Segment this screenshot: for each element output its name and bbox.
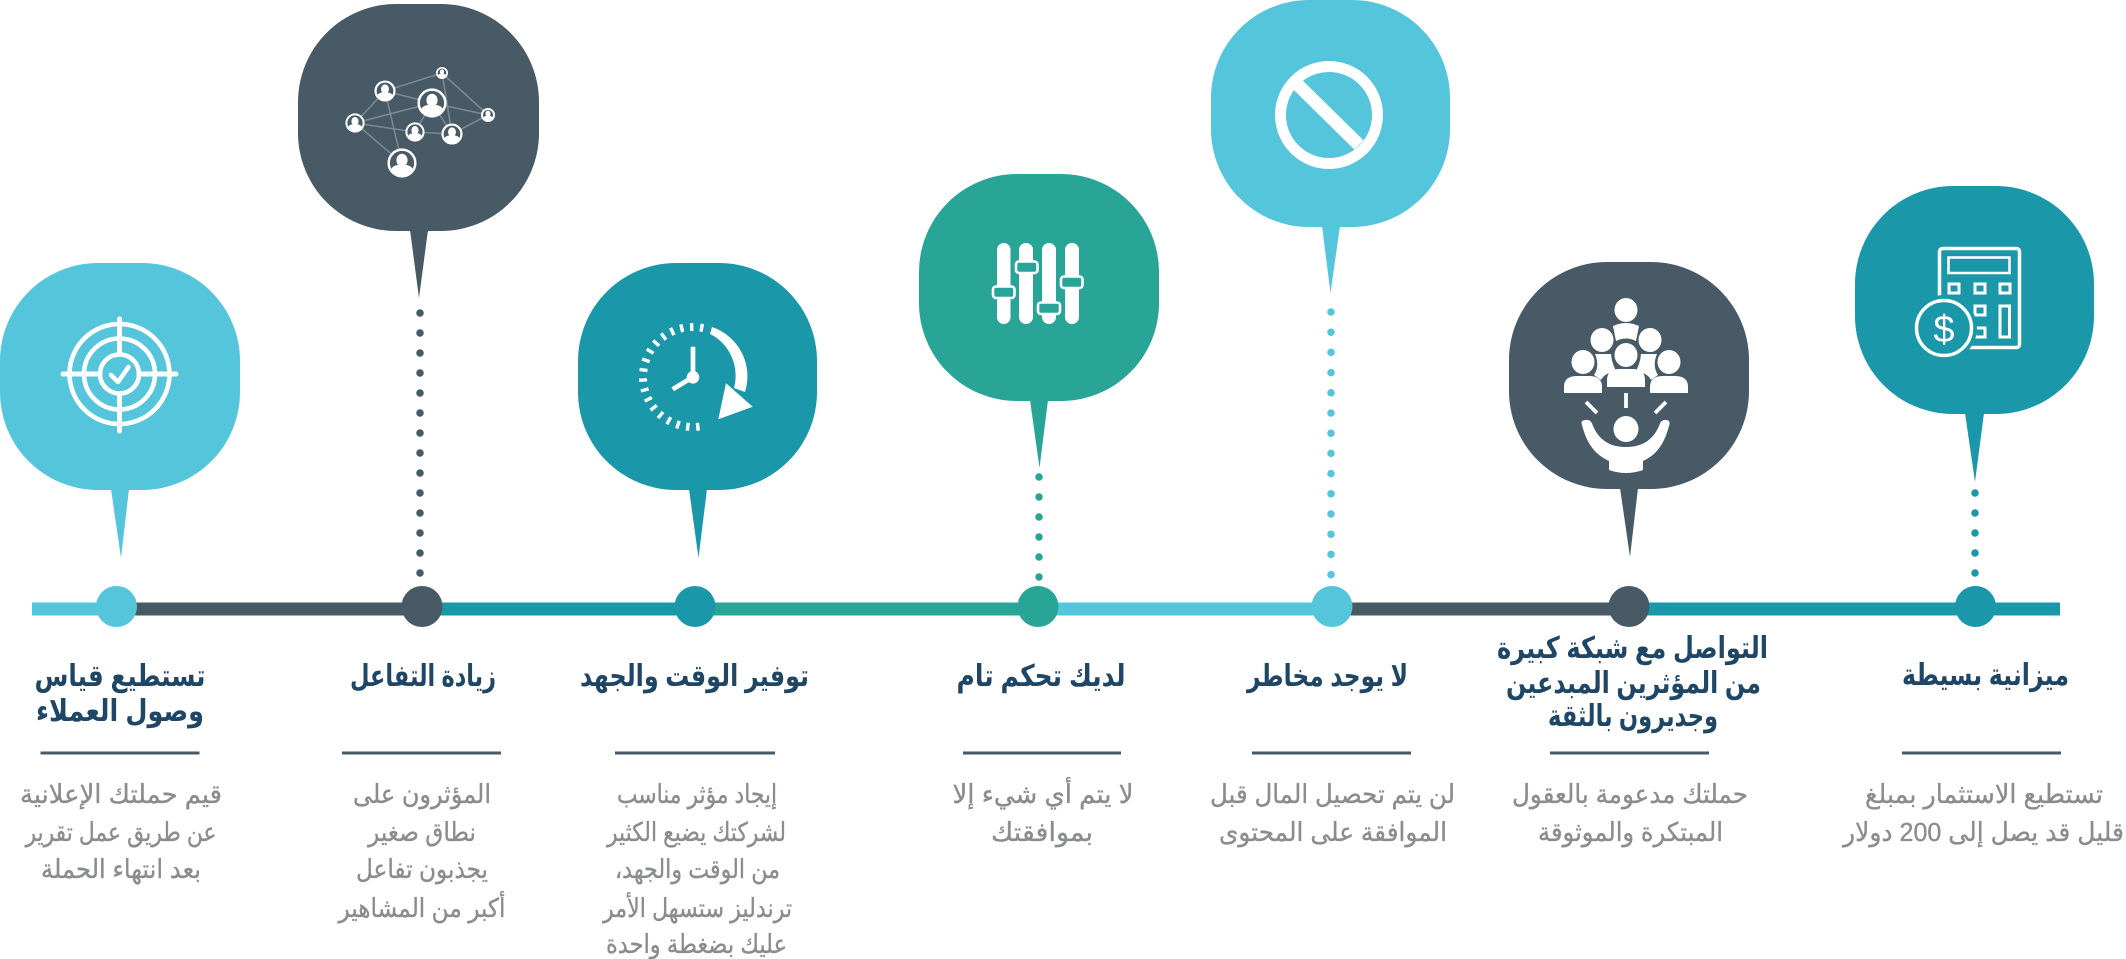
body 7: تستطيع الاستثمار بمبلغ: [1865, 779, 2103, 810]
body 6: [1512, 779, 1748, 848]
body 5: لن يتم تحصيل المال قبل: [1210, 779, 1455, 810]
panel: no risk: [1210, 0, 1455, 848]
body 4: بموافقتك: [991, 817, 1093, 848]
title 6: من المؤثرين المبدعين: [1506, 667, 1761, 700]
body 3: لشركتك يضيع الكثير: [605, 817, 786, 848]
pin bubble 2: [298, 4, 539, 298]
body 7: [1841, 779, 2124, 848]
dotted connector 2: [416, 313, 424, 575]
title 5: لا يوجد مخاطر: [1245, 660, 1408, 693]
body 1: قيم حملتك الإعلانية: [20, 779, 222, 810]
body 4: لا يتم أي شيء إلا: [952, 776, 1134, 810]
panel: network of influencers: [1497, 262, 1768, 848]
node 4: [1018, 586, 1058, 627]
pin bubble 3: [578, 263, 817, 558]
node 3: [674, 586, 716, 627]
dotted connector 7: [1971, 493, 1979, 575]
title 4: لديك تحكم تام: [956, 660, 1126, 694]
body 7: قليل قد يصل إلى 200 دولار: [1841, 817, 2124, 848]
body 1: بعد انتهاء الحملة: [41, 854, 201, 885]
title 6: وجديرون بالثقة: [1548, 700, 1718, 734]
body 6: حملتك مدعومة بالعقول: [1512, 779, 1748, 810]
pin bubble 7: [1855, 186, 2094, 482]
timeline bar: [32, 602, 2060, 616]
node 1: [96, 586, 137, 627]
title 7: ميزانية بسيطة: [1902, 659, 2069, 692]
pin bubble 5: [1211, 0, 1450, 293]
body 2: أكبر من المشاهير: [337, 890, 506, 924]
icon: prohibition sign: [1280, 66, 1378, 164]
body 5: [1210, 779, 1455, 848]
body 3: ترندليز ستسهل الأمر: [601, 891, 792, 924]
title 6: التواصل مع شبكة كبيرة: [1497, 632, 1768, 665]
panel: save time: [578, 263, 817, 959]
dotted connector 5: [1327, 312, 1335, 575]
panel: full control: [919, 174, 1159, 848]
icon: clock with arrow: [639, 323, 753, 431]
icon: calculator and coin: $: [1933, 309, 1955, 351]
body 4: [952, 776, 1134, 848]
pin bubble 6: [1509, 262, 1749, 557]
node 7: [1955, 586, 1996, 627]
body 1: عن طريق عمل تقرير: [24, 817, 217, 848]
body 6: المبتكرة والموثوقة: [1538, 817, 1723, 848]
title 6: [1497, 632, 1768, 734]
body 2: يجذبون تفاعل: [356, 854, 488, 885]
icon: target with check: [63, 319, 176, 431]
icon: sliders: [993, 243, 1082, 324]
icon: people network: [346, 68, 494, 177]
body 2: المؤثرون على: [353, 779, 491, 810]
dotted connector 4: [1035, 477, 1043, 578]
panel: simple budget: [1841, 186, 2124, 848]
body 3: إيجاد مؤثر مناسب: [617, 779, 777, 810]
body 3: عليك بضغطة واحدة: [606, 929, 787, 959]
node 2: [402, 586, 442, 627]
icon: calculator and coin: [1911, 248, 2020, 361]
body 1: [20, 779, 222, 885]
body 3: [601, 779, 792, 959]
title 3: توفير الوقت والجهد: [580, 660, 809, 694]
pin bubble 1: [0, 263, 240, 558]
body 2: نطاق صغير: [366, 817, 476, 848]
node 5: [1312, 586, 1352, 627]
title 1: [34, 660, 206, 729]
icon: crowd and person: [1564, 298, 1688, 473]
node 6: [1608, 586, 1650, 627]
panel: measure reach: [0, 263, 240, 885]
pin bubble 4: [919, 174, 1159, 468]
title 2: زيادة التفاعل: [350, 660, 496, 693]
body 3: من الوقت والجهد،: [615, 854, 780, 885]
body 5: الموافقة على المحتوى: [1219, 817, 1447, 848]
body 2: [337, 779, 506, 924]
title 1: تستطيع قياس: [34, 660, 206, 693]
title 1: وصول العملاء: [36, 695, 204, 729]
panel: engagement: [298, 4, 539, 924]
